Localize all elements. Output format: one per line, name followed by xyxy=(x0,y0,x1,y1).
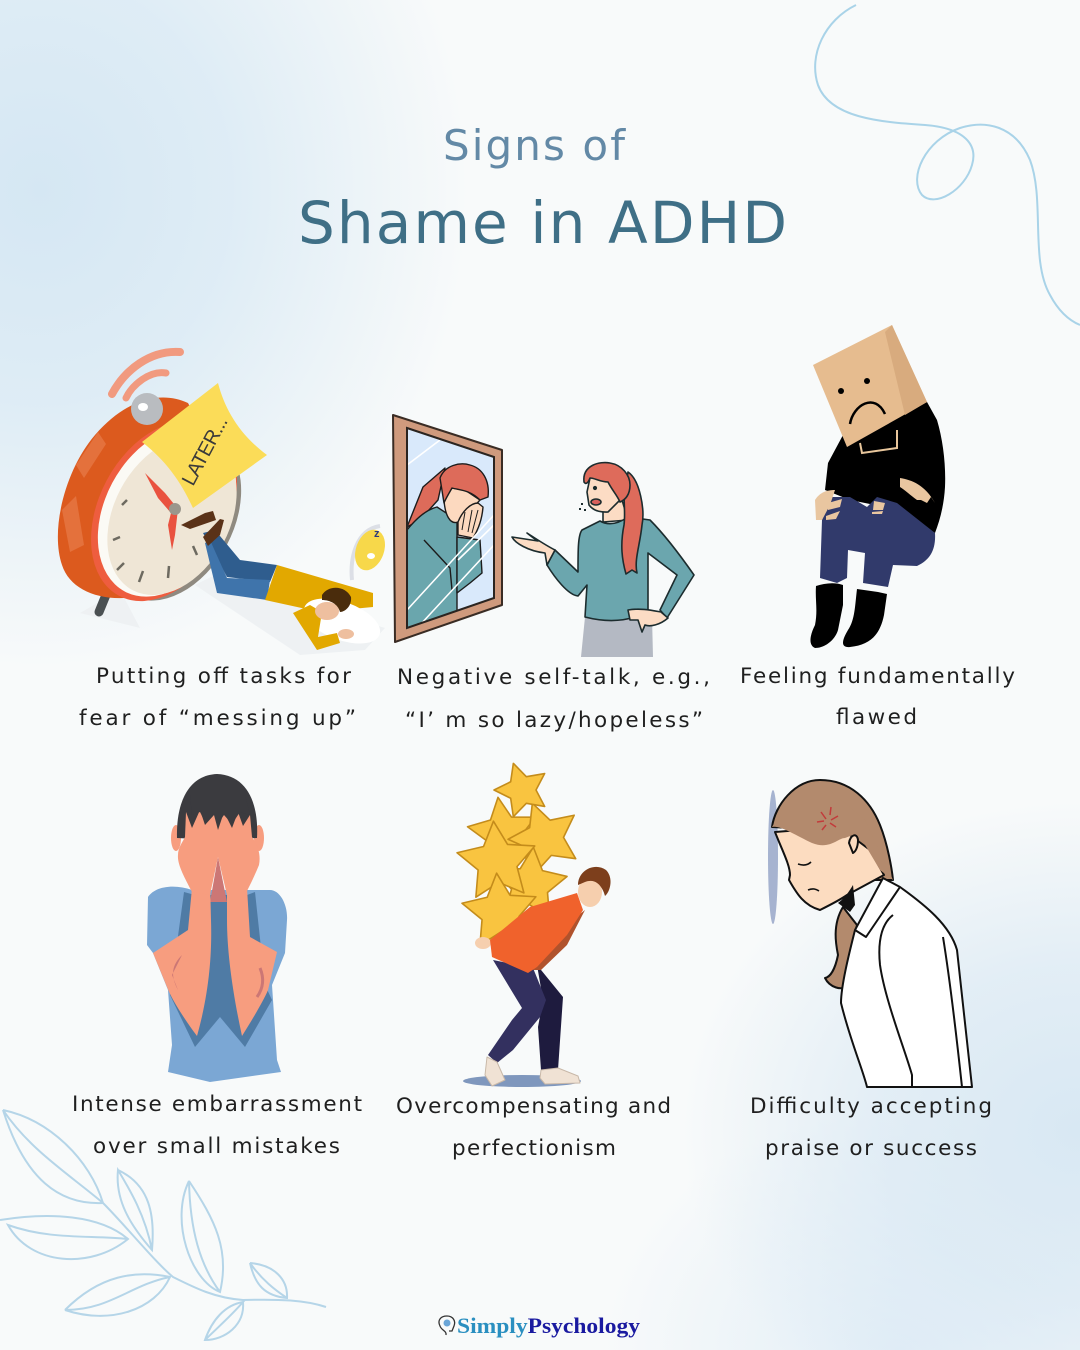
caption: Overcompensating: perfectionism xyxy=(452,1136,616,1161)
teal top xyxy=(547,517,694,621)
mouth xyxy=(808,889,819,891)
anger mark xyxy=(817,807,838,830)
chin shadow xyxy=(838,885,855,912)
shirt xyxy=(147,887,287,1082)
decorative curl top right xyxy=(815,5,1080,325)
right hand xyxy=(900,478,935,503)
inner jacket xyxy=(533,910,585,970)
paper bag xyxy=(813,325,927,453)
clock bell xyxy=(131,393,163,425)
jacket xyxy=(490,893,583,973)
skirt xyxy=(581,616,653,657)
eye xyxy=(594,487,596,489)
clock face xyxy=(62,396,269,626)
hand xyxy=(475,937,491,949)
caption: Negative self-talk: “I’ m so lazy/hopeless” xyxy=(405,708,703,733)
back leg xyxy=(537,965,563,1070)
arm right xyxy=(227,880,277,1036)
mirror inner border xyxy=(407,428,494,628)
logo: SimplyPsychology xyxy=(439,1313,640,1338)
clock hands xyxy=(145,473,178,550)
hair fringe xyxy=(190,795,250,824)
closed eye xyxy=(798,862,811,865)
caption: Feeling flawed: flawed xyxy=(836,705,917,730)
wall shadow xyxy=(768,790,778,924)
illustration: man covering his face xyxy=(147,774,287,1082)
ear xyxy=(849,835,858,853)
front leg xyxy=(488,960,546,1063)
caption: Negative self-talk: Negative self-talk, e.g., xyxy=(397,665,710,690)
illustration: woman talking to mirror xyxy=(393,415,502,642)
jeans rips xyxy=(826,499,885,520)
hands over face xyxy=(178,810,260,895)
caption: Feeling flawed: Feeling fundamentally xyxy=(740,664,1015,689)
fringe xyxy=(772,782,893,880)
back hair xyxy=(772,780,893,880)
title xyxy=(298,121,787,257)
arm left xyxy=(153,880,211,1036)
logo text: SimplyPsychology xyxy=(457,1313,640,1338)
logo icon xyxy=(439,1316,455,1335)
illustration: woman with head against wall xyxy=(768,780,972,1087)
boots xyxy=(810,583,843,648)
illustration: man with paper bag on head xyxy=(810,325,945,648)
caption: Difficulty accepting praise: praise or success xyxy=(765,1136,977,1161)
shoes xyxy=(485,1057,505,1086)
elbow creases xyxy=(172,955,182,990)
shirt shadow xyxy=(170,892,272,1047)
caption: Difficulty accepting praise: Difficulty accepting xyxy=(750,1094,992,1119)
illustration: woman scolding xyxy=(512,463,694,657)
left hand xyxy=(815,490,835,520)
mouth xyxy=(591,499,601,505)
ground shadow xyxy=(463,1075,581,1087)
caption: Intense embarrassment: over small mistakes xyxy=(93,1134,340,1159)
hair xyxy=(578,867,611,896)
decorative leaf branch bottom left xyxy=(0,1110,326,1340)
gesturing hand xyxy=(512,533,555,565)
white shirt xyxy=(841,878,972,1087)
face and neck xyxy=(775,830,884,910)
sticky note: LATER... xyxy=(178,413,233,489)
clock body xyxy=(58,398,240,598)
mirror frame xyxy=(393,415,502,642)
caption: Feeling flawed xyxy=(740,664,1015,730)
caption: Overcompensating: Overcompensating and xyxy=(396,1094,671,1119)
caption: Overcompensating xyxy=(396,1094,671,1161)
title line: Shame in ADHD: Shame in ADHD xyxy=(298,189,787,257)
sleeping person xyxy=(181,511,386,653)
clock foot xyxy=(99,590,108,612)
collar and sleeve xyxy=(855,887,962,1087)
ringing waves xyxy=(112,352,180,394)
caption: Intense embarrassment: Intense embarrassment xyxy=(72,1092,362,1117)
speech dashes xyxy=(579,504,586,510)
caption: Difficulty accepting praise xyxy=(750,1094,992,1161)
hip hand xyxy=(628,609,668,632)
sticky note xyxy=(142,383,267,508)
illustration: man carrying stars xyxy=(455,755,611,1087)
caption: Putting off tasks: fear of “messing up” xyxy=(79,706,356,731)
torso xyxy=(825,402,945,533)
caption: Putting off tasks: Putting off tasks for xyxy=(96,664,351,689)
ground shadow xyxy=(80,575,385,655)
ponytail xyxy=(622,472,643,574)
dream bubble: z xyxy=(374,528,380,540)
stars pile xyxy=(455,755,588,947)
ears xyxy=(171,825,181,851)
mirror glass with reflection xyxy=(407,428,494,632)
head xyxy=(578,877,602,907)
hair xyxy=(584,463,630,502)
ponytail xyxy=(825,907,857,988)
head xyxy=(587,472,620,512)
neck xyxy=(603,500,628,522)
dream bubble xyxy=(350,525,390,580)
jeans xyxy=(820,497,935,587)
neck xyxy=(210,857,227,902)
caption: Putting off tasks xyxy=(79,664,356,731)
caption: Negative self-talk xyxy=(397,665,710,733)
title line: Signs of: Signs of xyxy=(443,121,626,170)
hair xyxy=(177,774,257,840)
illustration: alarm clock with person sleeping xyxy=(58,352,390,655)
caption: Intense embarrassment xyxy=(72,1092,362,1159)
